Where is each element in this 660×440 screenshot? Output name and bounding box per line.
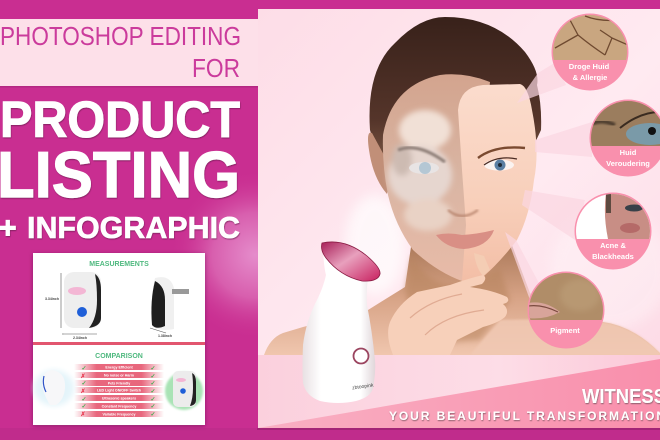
comparison table [74, 364, 164, 418]
left brow [398, 148, 445, 162]
comparison table: Constant Frequency [102, 404, 136, 408]
comparison table: Ultrasonic speakers [102, 396, 136, 400]
ear [368, 132, 388, 194]
label line 2: Blackheads [592, 252, 634, 261]
divider [33, 342, 205, 345]
comparison table: ✓ [150, 381, 156, 387]
hand [388, 275, 508, 355]
comparison table: ✓ [150, 374, 156, 380]
callout: ageing skin [590, 100, 660, 176]
comparison table: ✓ [81, 404, 87, 410]
device side view [150, 277, 189, 338]
banner subheading: YOUR BEAUTIFUL TRANSFORMATION [389, 409, 660, 423]
shoulders and neck [264, 240, 660, 355]
comparison table: ✗ [80, 411, 86, 418]
right brow [478, 147, 525, 158]
label line 2: Veroudering [606, 159, 650, 168]
product device with green halo [165, 371, 203, 410]
heading: Photoshop Editing: PHOTOSHOP EDITING [0, 21, 241, 51]
label line 2: & Allergie [573, 73, 607, 82]
face lighter half [458, 84, 537, 281]
power button [354, 348, 368, 364]
device front with dimensions [45, 272, 101, 340]
callout: dry skin [550, 12, 630, 90]
label: Acne & [600, 241, 627, 250]
card heading: comparison: COMPARISON [95, 353, 143, 360]
label: Huid [620, 148, 637, 157]
competitor device [34, 370, 74, 406]
callout: pigment [528, 272, 604, 348]
floor [258, 355, 660, 428]
banner [258, 359, 660, 428]
comparison table: Variable Frequency [103, 412, 135, 416]
product: facial steamer [302, 242, 380, 403]
lips [436, 230, 494, 249]
comparison table: LED Light ON/OFF Switch [97, 388, 141, 392]
comparison table: ✓ [81, 366, 87, 372]
panel: skincare ad [258, 9, 660, 428]
comparison table: ✓ [81, 397, 87, 403]
title: Product: PRODUCT [0, 91, 240, 148]
right eye [484, 158, 517, 170]
comparison table: Pets Friendly [108, 382, 130, 386]
beams [505, 62, 592, 300]
comparison table: ✓ [81, 381, 87, 387]
heading: For: FOR [192, 53, 240, 83]
comparison table: ✗ [80, 388, 86, 395]
device side view: 1.38inch [158, 334, 172, 338]
comparison table: ✓ [150, 389, 156, 395]
title: Infographic: INFOGRAPHIC [27, 210, 240, 245]
model photo [264, 17, 660, 355]
comparison table: ✓ [150, 404, 156, 410]
comparison table: ✓ [150, 412, 156, 418]
left eye [409, 162, 439, 174]
face darker half [383, 74, 490, 281]
device front with dimensions: 3.34inch [45, 297, 59, 301]
comparison table: No noise or Harm [104, 374, 134, 378]
nose [448, 210, 478, 216]
callout: acne [574, 192, 652, 270]
white vitiligo patches [388, 110, 452, 231]
hair [370, 17, 541, 165]
chin patch [474, 253, 490, 276]
comparison table: Energy Efficient [105, 366, 133, 370]
heading band [0, 19, 258, 88]
comparison table: ✓ [150, 366, 156, 372]
title: Listing: LISTING [0, 138, 240, 211]
card heading: measurements: MEASUREMENTS [89, 261, 149, 268]
label: Droge Huid [569, 62, 610, 71]
comparison table: ✗ [80, 373, 86, 380]
label: Pigment [550, 326, 580, 335]
comparison table: ✓ [150, 397, 156, 403]
panel: sample infographic card [33, 253, 205, 425]
device front with dimensions: 2.34inch [73, 336, 87, 340]
brand label: zbtoopink [352, 382, 374, 391]
